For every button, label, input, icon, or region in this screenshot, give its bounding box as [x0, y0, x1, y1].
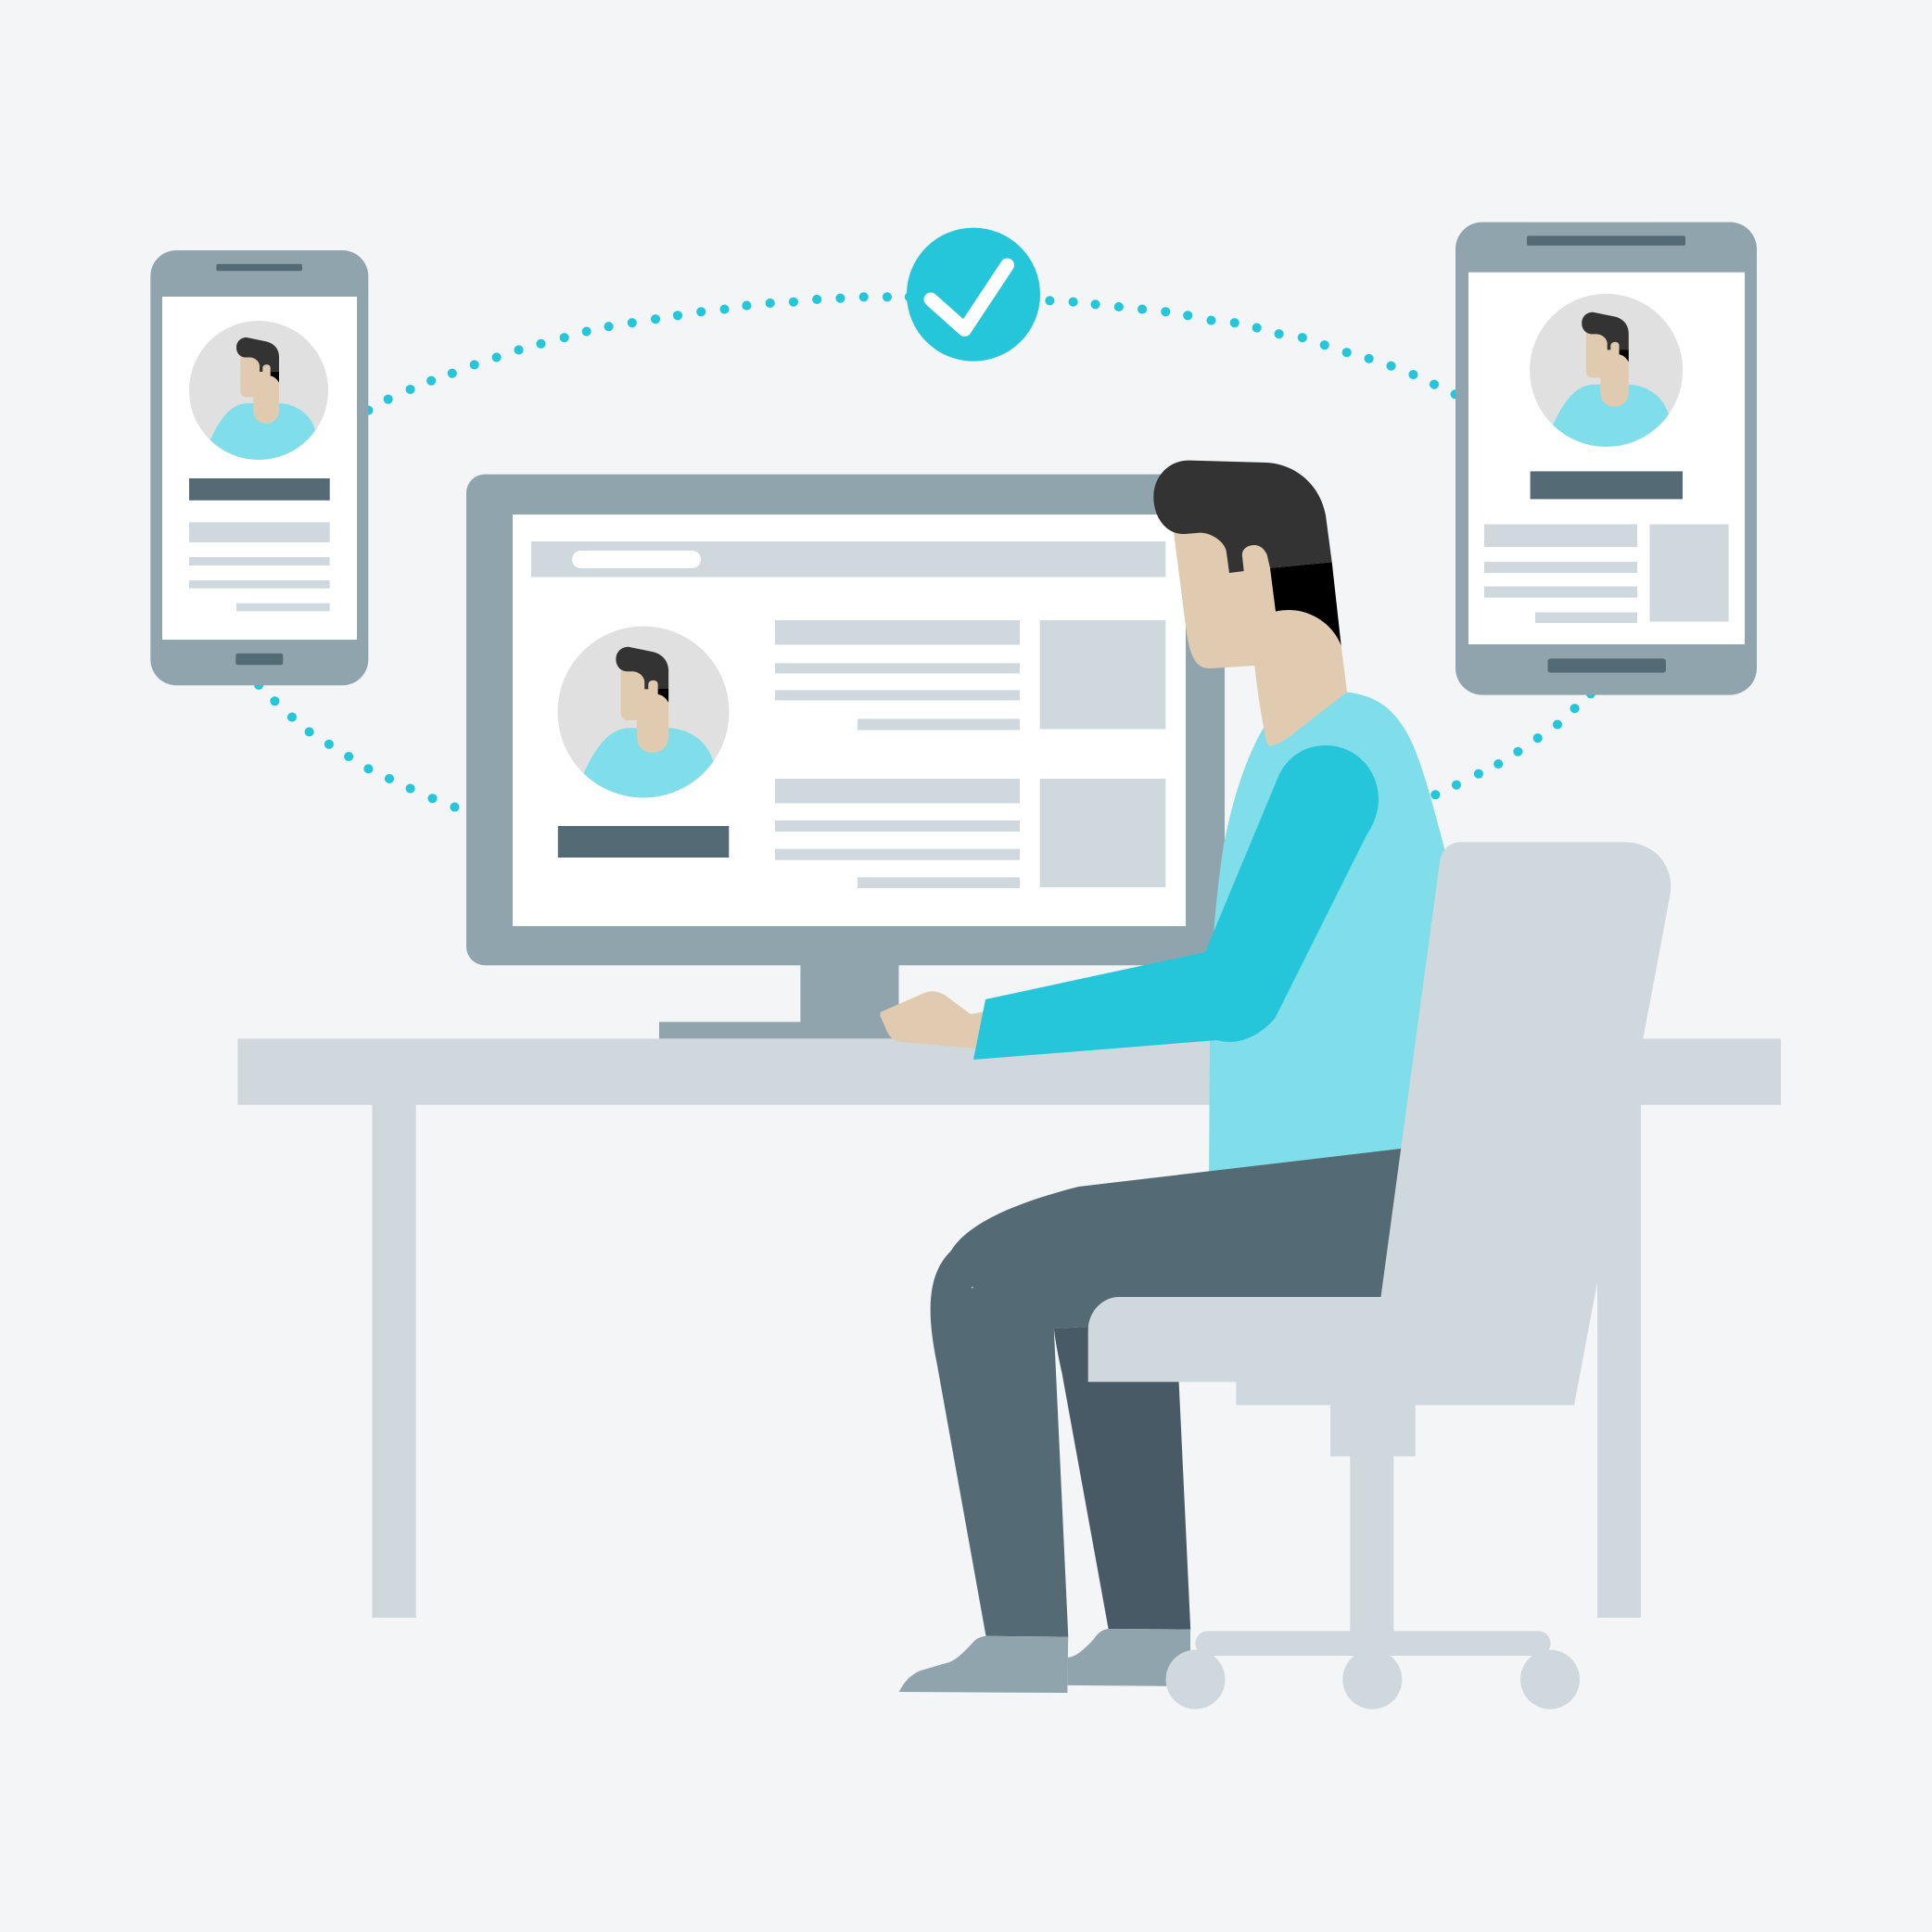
person: back shoe: [1068, 1629, 1190, 1686]
person: back leg: [1054, 1327, 1190, 1630]
panel: tablet: [1455, 222, 1757, 695]
smartphone content lines: [189, 522, 330, 611]
dotted connection lines: [254, 292, 1595, 812]
person: front leg: [931, 1149, 1428, 1637]
person: torso: [1209, 693, 1483, 1177]
person: speck on leg: [972, 1287, 973, 1289]
person: head and neck: [1174, 519, 1347, 745]
monitor profile name bar: [558, 826, 729, 858]
chair wheels: [1166, 1650, 1580, 1710]
chair base: [1196, 1631, 1550, 1656]
smartphone profile name bar: [189, 478, 330, 501]
tablet content blocks: [1484, 525, 1729, 623]
icon: check mark badge: [907, 228, 1040, 362]
monitor avatar: [558, 627, 729, 815]
monitor content row one: [775, 620, 1165, 730]
tablet avatar: [1530, 294, 1683, 462]
person: neck shadow hair: [1270, 562, 1341, 646]
chair back and seat: [1088, 842, 1671, 1632]
monitor content row two: [775, 779, 1165, 888]
panel: desktop monitor: [466, 475, 1225, 1038]
panel: desk: [237, 1038, 1781, 1618]
person: hair: [1153, 461, 1332, 573]
panel: office chair: [1088, 842, 1671, 1710]
tablet profile name bar: [1531, 471, 1683, 499]
person: hand: [880, 991, 985, 1049]
monitor search bar: [531, 541, 1165, 577]
illustration: user at desk with synced devices: [150, 222, 1781, 1710]
monitor stand: [659, 960, 899, 1038]
person: arm: [973, 745, 1379, 1060]
person: front shoe: [899, 1636, 1068, 1693]
panel: smartphone: [150, 250, 368, 685]
smartphone avatar: [189, 321, 328, 474]
